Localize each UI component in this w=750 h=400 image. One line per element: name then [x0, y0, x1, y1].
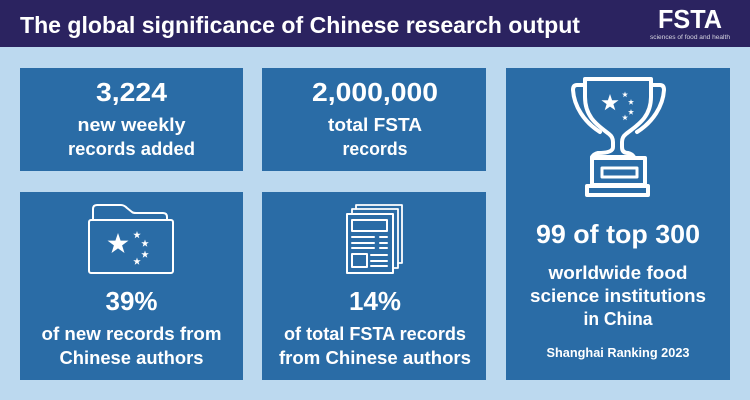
label: new weekly records added: new weekly — [78, 114, 186, 135]
panel: weekly records — [20, 68, 243, 171]
stat: 2,000,000: 2,000,000 — [312, 77, 438, 107]
label: of total FSTA records from Chinese authors — [279, 323, 471, 368]
label: worldwide food science institutions in China — [530, 262, 706, 329]
icon: trophy with stars — [573, 79, 664, 195]
label: total FSTA records: total FSTA — [328, 114, 422, 135]
logo: FSTA — [650, 4, 730, 41]
panel: total records — [262, 68, 486, 171]
stat: 14%: 14% — [349, 286, 401, 316]
label: worldwide food science institutions in China: science institutions — [530, 285, 706, 306]
panel: total records from Chinese authors — [262, 192, 486, 380]
icon: folder with stars — [89, 205, 173, 273]
label: of total FSTA records from Chinese authors: from Chinese authors — [279, 347, 471, 368]
label: worldwide food science institutions in China: worldwide food — [547, 262, 688, 283]
title: The global significance of Chinese research output — [20, 12, 580, 38]
label: of new records from Chinese authors: of new records from — [42, 323, 222, 344]
stat: 3,224: 3,224 — [96, 77, 168, 107]
logo: FSTA: sciences of food and health — [650, 34, 730, 41]
label: of total FSTA records from Chinese authors: of total FSTA records — [284, 323, 466, 344]
label: new weekly records added: records added — [68, 138, 195, 159]
header banner — [0, 0, 750, 47]
label: of new records from Chinese authors: Chinese authors — [60, 347, 204, 368]
stat: 99 of top 300: 99 of top 300 — [536, 219, 700, 249]
logo: FSTA: FSTA — [658, 4, 722, 34]
stat: 39%: 39% — [106, 286, 158, 316]
panel: top institutions — [506, 68, 730, 380]
label: of new records from Chinese authors — [42, 323, 222, 368]
label: new weekly records added — [68, 114, 195, 159]
label: total FSTA records — [328, 114, 422, 159]
label: total FSTA records: records — [342, 138, 408, 159]
source: Shanghai Ranking 2023: Shanghai Ranking 2023 — [546, 346, 690, 360]
icon: stacked newspapers — [347, 205, 402, 273]
label: worldwide food science institutions in China: in China — [584, 308, 653, 329]
panel: new records from Chinese authors — [20, 192, 243, 380]
